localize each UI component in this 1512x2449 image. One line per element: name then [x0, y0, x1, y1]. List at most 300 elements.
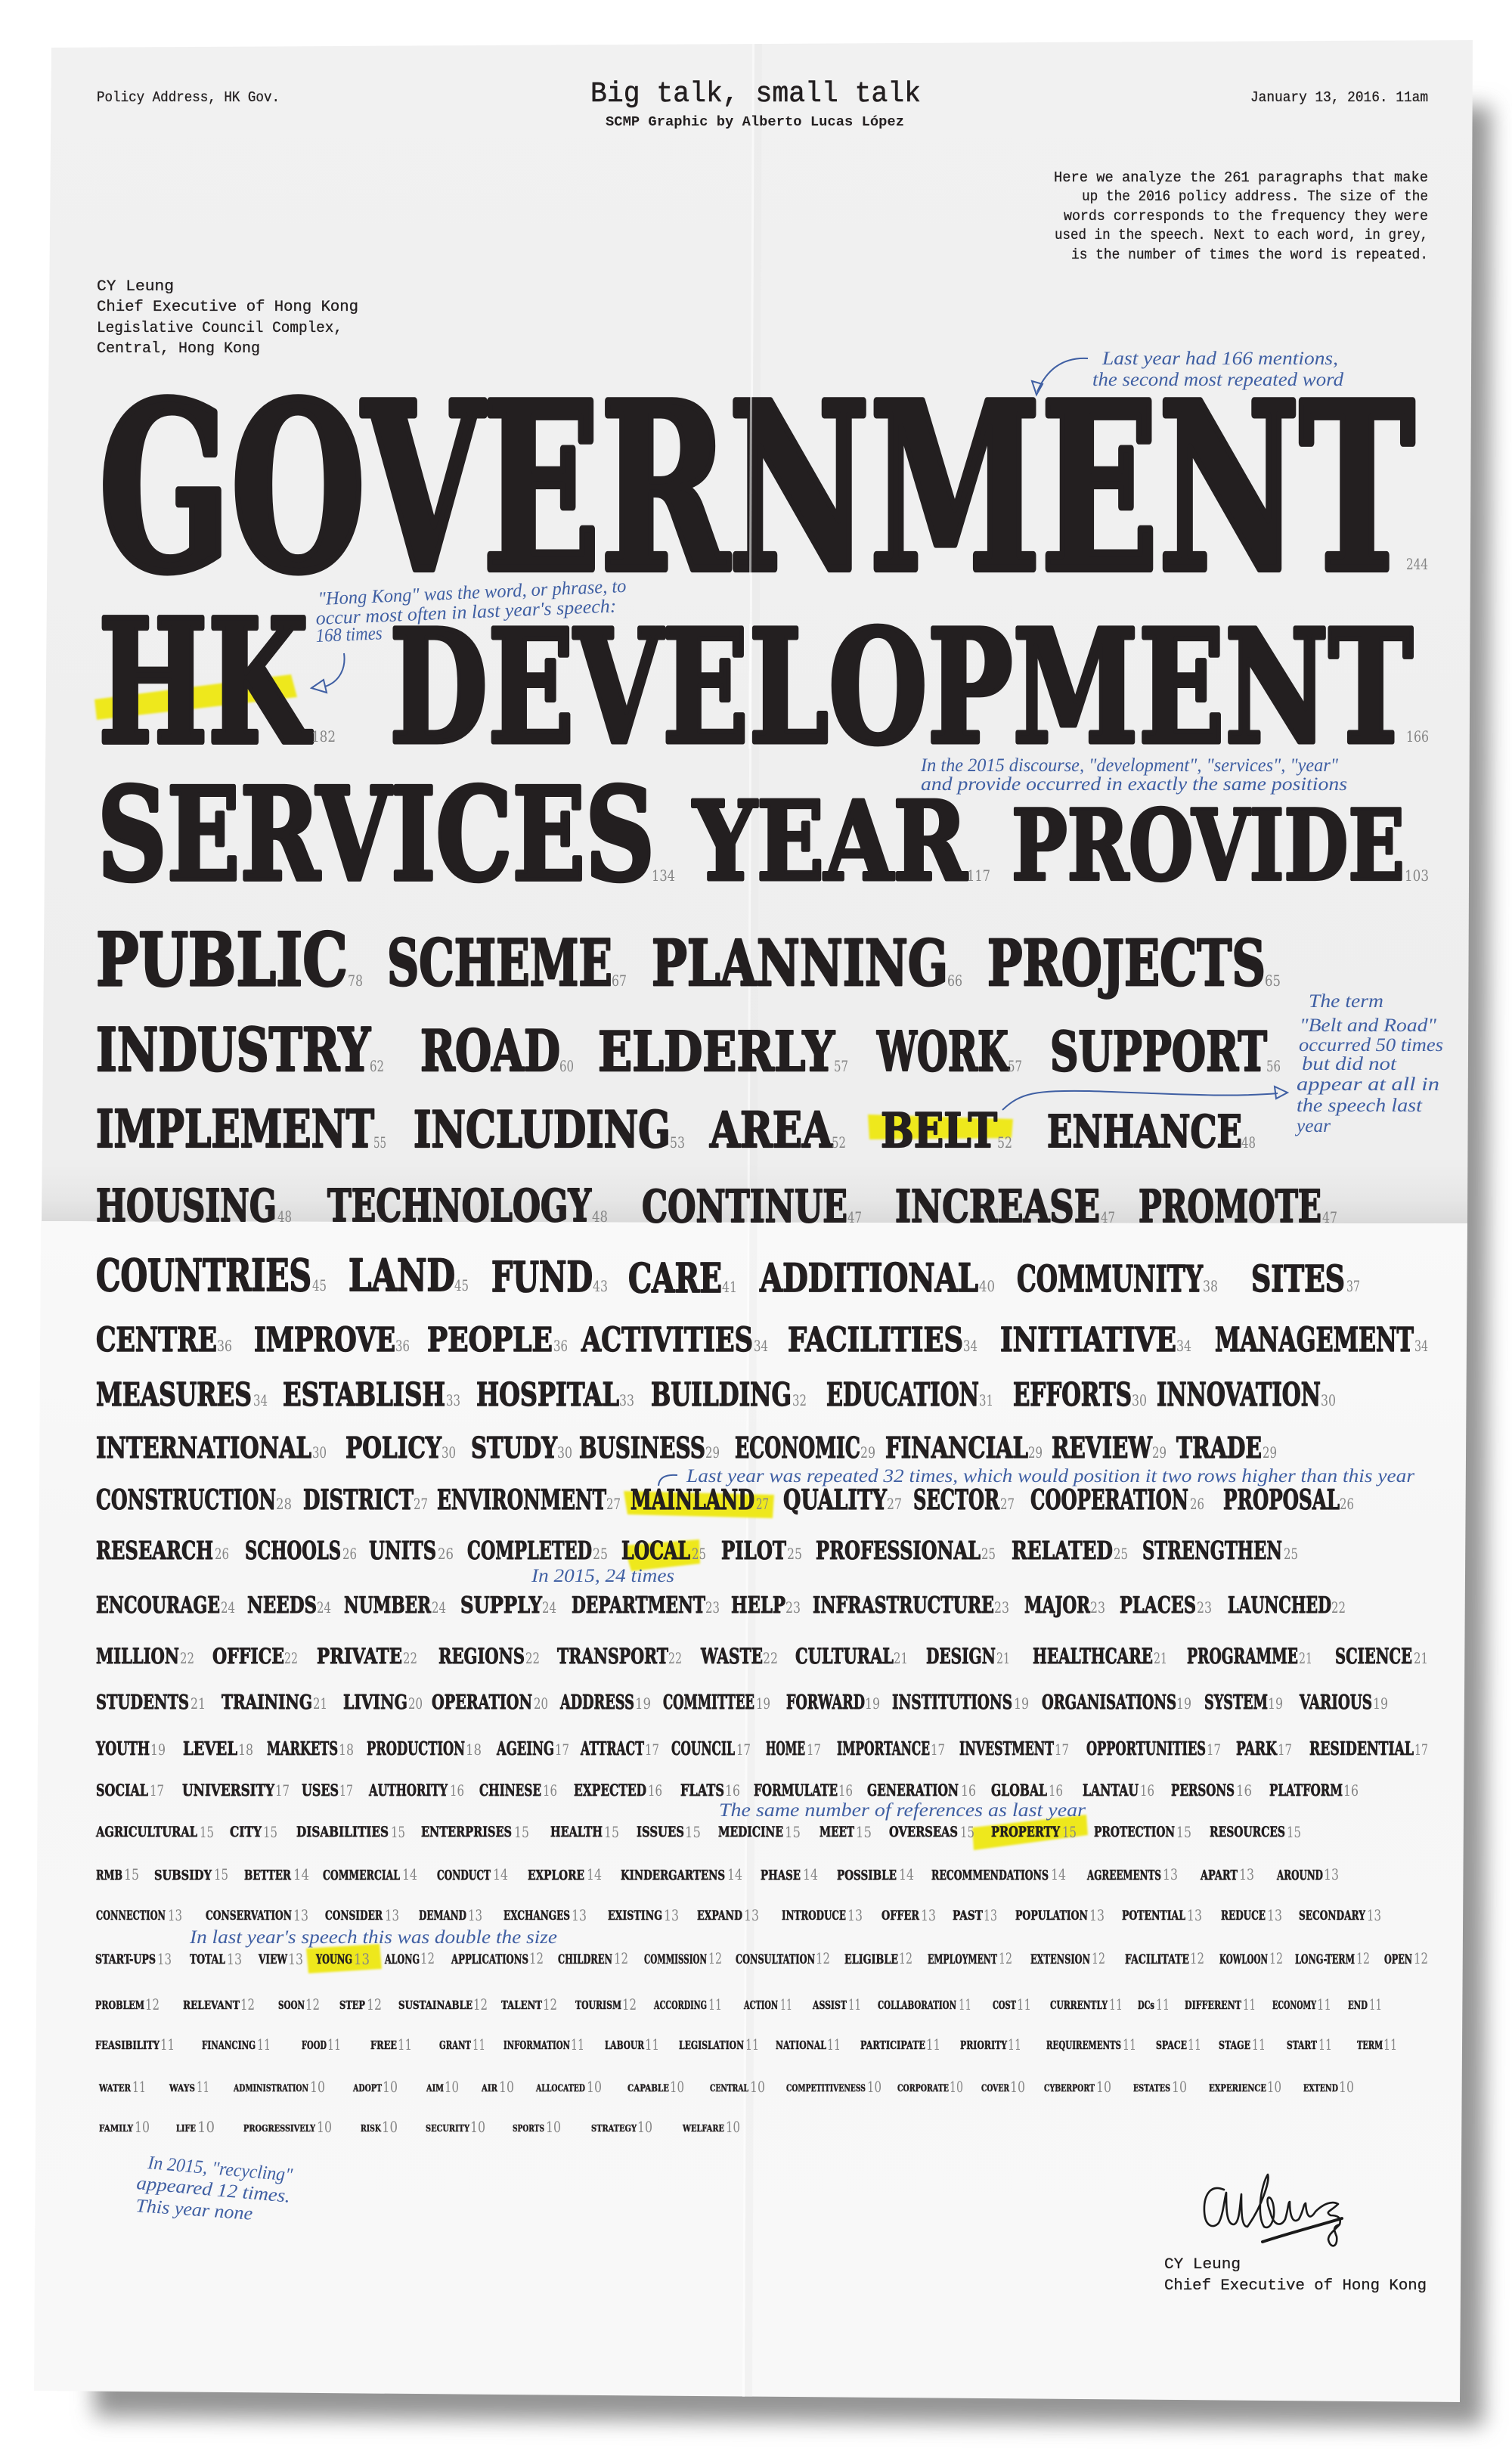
word row 24: 11	[571, 2035, 584, 2054]
word row 14: 23	[1197, 1598, 1212, 1617]
word row 23: 11	[1369, 1995, 1382, 2013]
word row 2: HK DEVELOPMENT: HK	[98, 583, 312, 783]
word row 19: 15	[856, 1823, 872, 1841]
word row 22: 12	[999, 1949, 1012, 1967]
word row 6: 52	[997, 1133, 1012, 1152]
word row 22: 12	[1092, 1949, 1105, 1967]
word row 11: TRADE	[1176, 1431, 1262, 1465]
word row 26: PROGRESSIVELY	[243, 2122, 316, 2134]
word row 19: 15	[960, 1823, 974, 1841]
word row 4	[96, 917, 1281, 1003]
word row 16: 19	[1373, 1694, 1388, 1713]
word row 18: CHINESE	[479, 1781, 541, 1800]
word row 6: 52	[832, 1133, 846, 1152]
word row 21: 13	[744, 1906, 759, 1924]
word row 5: ELDERLY	[598, 1019, 835, 1083]
word row 8: 43	[593, 1277, 608, 1295]
word row 6: 53	[670, 1133, 685, 1152]
note: same references: The same number of references as last year	[719, 1800, 1086, 1821]
word row 23: ACCORDING	[653, 1998, 707, 2012]
word row 1: GOVERNMENT: 244	[1406, 555, 1428, 573]
word row 22: LONG-TERM	[1295, 1952, 1355, 1967]
word row 21: DEMAND	[419, 1908, 466, 1924]
word row 23: 11	[959, 1995, 971, 2013]
word row 10: 33	[446, 1391, 460, 1409]
word row 17	[95, 1738, 1428, 1759]
word row 11: INTERNATIONAL	[96, 1431, 311, 1465]
word row 15	[96, 1644, 1428, 1669]
word row 21: POPULATION	[1015, 1908, 1088, 1924]
word row 22: 13	[354, 1950, 370, 1968]
note: last year had 166 mentions: the second most repeated word	[1092, 370, 1344, 390]
word row 26: STRATEGY	[591, 2122, 637, 2134]
header: left source: Policy Address, HK Gov.	[97, 89, 280, 106]
word row 24: 11	[160, 2035, 175, 2054]
word row 20: 15	[214, 1865, 228, 1883]
word row 22: OPEN	[1384, 1952, 1412, 1967]
word row 24: 11	[745, 2035, 759, 2054]
word row 21: 13	[1187, 1906, 1202, 1924]
word row 22: EMPLOYMENT	[928, 1952, 997, 1967]
word row 20: 14	[293, 1865, 309, 1883]
intro text block: up the 2016 policy address. The size of the	[1082, 188, 1428, 205]
word row 6: IMPLEMENT	[96, 1099, 374, 1160]
word row 26: 10	[382, 2118, 398, 2136]
word row 9: PEOPLE	[427, 1321, 553, 1359]
word row 20	[96, 1865, 1339, 1883]
word row 19: ENTERPRISES	[421, 1824, 512, 1840]
word row 17: PRODUCTION	[367, 1738, 465, 1759]
word row 22: ELIGIBLE	[844, 1952, 898, 1967]
word row 17: INVESTMENT	[959, 1738, 1054, 1759]
word row 25: 10	[1010, 2078, 1025, 2096]
note: 2015 discourse	[920, 755, 1347, 795]
word row 20: SUBSIDY	[154, 1868, 212, 1883]
word row 22: TOTAL	[190, 1952, 225, 1967]
word row 20: EXPLORE	[528, 1868, 584, 1883]
word row 16: ORGANISATIONS	[1042, 1691, 1176, 1714]
word row 22: APPLICATIONS	[451, 1952, 528, 1967]
word row 19: 15	[1062, 1823, 1077, 1841]
word row 18: 17	[275, 1781, 290, 1800]
word row 14: 24	[221, 1598, 235, 1617]
word row 19: DISABILITIES	[296, 1824, 389, 1840]
word row 25: 10	[587, 2078, 602, 2096]
word row 25: AIR	[481, 2083, 497, 2094]
word row 23: 11	[708, 1995, 722, 2013]
word row 26	[99, 2118, 740, 2136]
word row 19: 15	[263, 1823, 277, 1841]
word row 7: 47	[847, 1208, 862, 1226]
word row 6	[96, 1099, 1256, 1160]
word row 19	[95, 1823, 1301, 1841]
word row 2: HK DEVELOPMENT	[98, 583, 1429, 783]
word row 9: ACTIVITIES	[581, 1321, 753, 1359]
arrow: to HK	[311, 653, 345, 693]
word row 8: ADDITIONAL	[759, 1256, 978, 1301]
word row 16: 21	[191, 1694, 206, 1713]
word row 24: GRANT	[439, 2039, 471, 2052]
word row 8: 41	[722, 1278, 737, 1296]
word row 26: WELFARE	[682, 2122, 724, 2134]
word row 15: 22	[668, 1649, 682, 1667]
word row 25: ALLOCATED	[535, 2083, 585, 2094]
word row 23: 12	[367, 1995, 382, 2013]
word row 11: 29	[860, 1443, 875, 1462]
address block: CY Leung	[97, 278, 174, 296]
word row 13: RELATED	[1012, 1536, 1113, 1565]
word row 5: SUPPORT	[1050, 1019, 1267, 1083]
word row 25: 11	[132, 2078, 146, 2096]
word row 22: KOWLOON	[1219, 1952, 1268, 1967]
note: Belt and Road: appear at all in	[1297, 1074, 1439, 1095]
word row 19: CITY	[230, 1824, 262, 1840]
note: Belt and Road: occurred 50 times	[1299, 1035, 1443, 1056]
word row 3: YEAR	[692, 777, 968, 905]
word row 7: INCREASE	[895, 1180, 1100, 1232]
word row 24: 11	[398, 2035, 412, 2054]
word row 24: FINANCING	[202, 2039, 256, 2052]
note: 2015 discourse: and provide occurred in exactly the same positions	[921, 774, 1347, 795]
word row 19: 15	[1176, 1823, 1191, 1841]
word row 23: 12	[305, 1995, 320, 2013]
word row 17: LEVEL	[183, 1738, 237, 1759]
word row 5: 57	[1008, 1057, 1022, 1075]
note: recycling: This year none	[135, 2196, 253, 2224]
word row 18: GENERATION	[867, 1781, 959, 1800]
word row 16: 19	[1176, 1694, 1191, 1713]
word row 12: 27	[414, 1495, 428, 1513]
word row 23: 11	[848, 1995, 861, 2013]
word row 23: COLLABORATION	[878, 1998, 956, 2012]
word row 10: 33	[619, 1391, 634, 1409]
word row 23: 12	[543, 1995, 557, 2013]
word row 10: 34	[253, 1391, 268, 1409]
word row 17: 17	[736, 1741, 751, 1759]
word row 19: 15	[514, 1823, 529, 1841]
word row 16: TRAINING	[222, 1691, 312, 1714]
word row 12: ENVIRONMENT	[437, 1484, 606, 1516]
word row 13: 25	[1284, 1545, 1298, 1563]
word row 20: COMMERCIAL	[323, 1868, 400, 1883]
word row 22: COMMISSION	[644, 1952, 707, 1967]
word row 23: CURRENTLY	[1050, 1998, 1108, 2012]
title: Big talk, small talk	[590, 78, 921, 110]
word row 14	[96, 1592, 1346, 1619]
word row 7: 47	[1322, 1208, 1337, 1226]
word row 14: 23	[705, 1598, 720, 1617]
word row 20: 14	[587, 1865, 602, 1883]
word row 8: FUND	[491, 1252, 593, 1301]
word row 5: INDUSTRY	[96, 1015, 371, 1085]
word row 24: 11	[827, 2035, 841, 2054]
word row 20: 14	[727, 1865, 742, 1883]
word row 18: GLOBAL	[991, 1781, 1047, 1800]
word row 15: 22	[525, 1649, 540, 1667]
word row 21: PAST	[953, 1908, 983, 1924]
word row 12: 26	[1190, 1495, 1204, 1513]
word row 19: OVERSEAS	[889, 1824, 958, 1840]
word row 24: STAGE	[1219, 2039, 1250, 2052]
word row 19: 15	[785, 1823, 801, 1841]
word row 14: 23	[785, 1598, 801, 1617]
word row 26: SECURITY	[426, 2122, 470, 2134]
word row 10: INNOVATION	[1157, 1376, 1321, 1413]
word row 25: CENTRAL	[710, 2083, 748, 2094]
word row 23: DCs	[1138, 1998, 1154, 2012]
word row 25: EXPERIENCE	[1209, 2083, 1266, 2094]
word row 23: 12	[145, 1995, 160, 2013]
word row 25: 10	[1339, 2078, 1354, 2096]
word row 16: LIVING	[343, 1691, 407, 1714]
word row 24: 11	[1318, 2035, 1332, 2054]
word row 12: COOPERATION	[1030, 1484, 1188, 1516]
word row 20: 14	[803, 1865, 818, 1883]
word row 12: SECTOR	[913, 1484, 1000, 1516]
word row 18: 16	[1343, 1781, 1359, 1800]
word row 18: 16	[838, 1781, 853, 1800]
word row 25: 10	[1096, 2078, 1111, 2096]
word row 14: MAJOR	[1024, 1592, 1091, 1619]
word row 12: QUALITY	[783, 1484, 888, 1516]
word row 21: 13	[847, 1906, 863, 1924]
note: Hong Kong: 168 times	[315, 623, 383, 646]
word row 16: ADDRESS	[559, 1691, 634, 1714]
word row 13: PILOT	[721, 1536, 786, 1565]
word row 18: EXPECTED	[574, 1781, 646, 1800]
word row 11: POLICY	[345, 1431, 442, 1465]
word row 16: VARIOUS	[1299, 1691, 1372, 1714]
word row 23: 11	[1243, 1995, 1256, 2013]
word row 9: 36	[553, 1337, 568, 1355]
word row 26: FAMILY	[99, 2122, 134, 2134]
word row 13: 25	[981, 1545, 996, 1563]
word row 14: NUMBER	[344, 1592, 432, 1619]
word row 17: 17	[1207, 1741, 1221, 1759]
note: double the size: In last year's speech this was double the size	[189, 1927, 557, 1948]
word row 17: IMPORTANCE	[837, 1738, 930, 1759]
word row 23: SOON	[278, 1998, 305, 2012]
word row 21: 13	[1089, 1906, 1105, 1924]
word row 22: 12	[899, 1949, 912, 1967]
word row 25: CORPORATE	[897, 2083, 949, 2094]
word row 18: LANTAU	[1083, 1781, 1139, 1800]
word row 9: 36	[395, 1337, 410, 1355]
word row 4: 67	[612, 972, 627, 990]
word row 22: 12	[1190, 1949, 1204, 1967]
word row 23: END	[1348, 1998, 1368, 2012]
word row 4: 78	[348, 972, 363, 990]
word row 15: PRIVATE	[317, 1644, 402, 1669]
word row 17: 17	[1278, 1741, 1292, 1759]
sign-off text: Chief Executive of Hong Kong	[1164, 2277, 1427, 2295]
intro text block: words corresponds to the frequency they were	[1064, 208, 1428, 225]
word row 20: RECOMMENDATIONS	[931, 1868, 1049, 1883]
word row 10: HOSPITAL	[476, 1376, 619, 1413]
word row 12: 28	[276, 1495, 292, 1513]
word row 26: 10	[637, 2118, 652, 2136]
word row 23: 11	[1017, 1995, 1031, 2013]
word row 22: 12	[708, 1949, 722, 1967]
word row 12	[96, 1484, 1354, 1516]
word row 23: 11	[1109, 1995, 1123, 2013]
word row 6: ENHANCE	[1047, 1105, 1242, 1158]
word row 3	[98, 759, 1429, 910]
word row 21: 13	[572, 1906, 587, 1924]
word row 23: ECONOMY	[1272, 1998, 1316, 2012]
word row 6: INCLUDING	[414, 1100, 671, 1159]
word row 24: SPACE	[1156, 2039, 1187, 2052]
word row 23	[95, 1995, 1382, 2013]
word row 22: VIEW	[258, 1952, 287, 1967]
word row 11: ECONOMIC	[735, 1431, 860, 1465]
signature	[1204, 2175, 1342, 2246]
word row 9: 34	[1414, 1337, 1428, 1355]
word row 14: INFRASTRUCTURE	[813, 1592, 994, 1619]
word row 14: ENCOURAGE	[96, 1592, 220, 1619]
word row 8: COUNTRIES	[96, 1250, 311, 1301]
word row 21: 13	[1267, 1906, 1282, 1924]
word row 21: 13	[921, 1906, 936, 1924]
word row 22: FACILITATE	[1125, 1952, 1189, 1967]
word row 21: POTENTIAL	[1122, 1908, 1185, 1924]
word row 17: RESIDENTIAL	[1309, 1738, 1414, 1759]
highlight: MAINLAND	[624, 1491, 774, 1518]
word row 18: FLATS	[680, 1781, 724, 1800]
highlight: HK	[94, 674, 297, 720]
word row 22: CONSULTATION	[736, 1952, 815, 1967]
word row 16: 19	[756, 1694, 770, 1713]
word row 22: 12	[1269, 1949, 1283, 1967]
word row 23: PROBLEM	[95, 1998, 144, 2012]
word row 20: PHASE	[761, 1868, 801, 1883]
word row 15: MILLION	[96, 1644, 179, 1669]
word row 21: OFFER	[881, 1908, 920, 1924]
word row 23: ACTION	[743, 1998, 778, 2012]
word row 12: PROPOSAL	[1223, 1484, 1340, 1516]
word row 16: 21	[313, 1694, 327, 1713]
word row 17: PARK	[1236, 1738, 1278, 1759]
word row 15: 22	[763, 1649, 778, 1667]
word row 17: 19	[150, 1741, 166, 1759]
word row 26: SPORTS	[513, 2122, 544, 2134]
word row 12: 27	[606, 1495, 621, 1513]
word row 13: 26	[438, 1545, 454, 1563]
word row 7: 48	[277, 1207, 292, 1226]
word row 17: MARKETS	[267, 1738, 338, 1759]
word row 22: CHILDREN	[558, 1952, 612, 1967]
word row 7: 48	[592, 1207, 608, 1226]
intro text block: Here we analyze the 261 paragraphs that make	[1054, 169, 1428, 186]
word row 10: EDUCATION	[826, 1376, 979, 1413]
word row 8: COMMUNITY	[1017, 1258, 1203, 1300]
word row 23: 12	[622, 1995, 637, 2013]
word row 13: 25	[1114, 1545, 1128, 1563]
word row 19: PROTECTION	[1094, 1824, 1175, 1840]
word row 14: 22	[1331, 1598, 1346, 1617]
word row 23: DIFFERENT	[1185, 1998, 1242, 2012]
word row 26: 10	[546, 2118, 561, 2136]
word row 25: CYBERPORT	[1044, 2083, 1095, 2094]
word row 5: 57	[834, 1057, 848, 1075]
word row 15: OFFICE	[212, 1644, 284, 1669]
sign-off text	[1164, 2256, 1427, 2295]
word row 25: 10	[1172, 2078, 1187, 2096]
word row 21: SECONDARY	[1299, 1908, 1366, 1924]
word row 5: 56	[1266, 1057, 1281, 1075]
word row 11: STUDY	[471, 1431, 558, 1465]
word row 18: 17	[339, 1781, 353, 1800]
word row 18: PLATFORM	[1269, 1781, 1343, 1800]
word row 12: DISTRICT	[303, 1484, 414, 1516]
word row 5: 62	[370, 1057, 384, 1075]
note: In 2015, 24 times: In 2015, 24 times	[531, 1566, 674, 1586]
word row 25: AIM	[426, 2083, 444, 2094]
word row 24: LEGISLATION	[679, 2039, 744, 2052]
word row 20: 13	[1163, 1865, 1178, 1883]
intro text block	[1054, 169, 1428, 263]
word row 13: 25	[692, 1545, 706, 1563]
word row 20: 14	[402, 1865, 417, 1883]
word row 17: 17	[931, 1741, 945, 1759]
word row 10: 30	[1321, 1391, 1336, 1409]
word row 4: PLANNING	[652, 926, 948, 1000]
note: Hong Kong: "Hong Kong" was the word, or phrase, to	[318, 576, 627, 609]
word row 15: REGIONS	[438, 1644, 525, 1669]
word row 17: 17	[555, 1741, 569, 1759]
highlight: LOCAL	[624, 1539, 700, 1571]
word row 23: STEP	[339, 1998, 365, 2012]
word row 18: 16	[648, 1781, 662, 1800]
word row 6: 55	[373, 1133, 386, 1152]
word row 3: 134	[652, 866, 675, 885]
word row 14: 24	[542, 1598, 556, 1617]
word row 19: AGRICULTURAL	[95, 1824, 197, 1840]
word row 12: 27	[756, 1495, 769, 1513]
word row 18: USES	[302, 1781, 339, 1800]
word row 13: COMPLETED	[467, 1536, 592, 1565]
word row 15: 21	[894, 1649, 908, 1667]
word row 20: 14	[899, 1865, 914, 1883]
word row 20: 15	[124, 1865, 139, 1883]
word row 26: RISK	[361, 2122, 382, 2134]
word row 25: 10	[383, 2078, 398, 2096]
word row 20: AGREEMENTS	[1086, 1868, 1161, 1883]
word row 25: EXTEND	[1303, 2083, 1338, 2094]
word row 17: OPPORTUNITIES	[1086, 1738, 1206, 1759]
word row 24: INFORMATION	[503, 2039, 570, 2052]
word row 18: 16	[725, 1781, 740, 1800]
word row 17: COUNCIL	[671, 1738, 735, 1759]
note: Belt and Road: The term	[1309, 991, 1383, 1012]
address block	[97, 278, 358, 358]
word row 25: 10	[950, 2078, 963, 2096]
note: last year MAINLAND: Last year was repeated 32 times, which would position it two rows higher than this year	[686, 1466, 1414, 1486]
word row 25: 10	[1267, 2078, 1281, 2096]
word row 20: 13	[1239, 1865, 1254, 1883]
word row 14: 24	[432, 1598, 446, 1617]
word row 23: ASSIST	[812, 1998, 847, 2012]
word row 20: KINDERGARTENS	[621, 1868, 725, 1883]
word row 8: 38	[1203, 1277, 1218, 1295]
word row 15: PROGRAMME	[1187, 1644, 1298, 1669]
word row 21: CONNECTION	[96, 1908, 166, 1924]
word row 14: NEEDS	[247, 1592, 317, 1619]
word row 6: 48	[1241, 1133, 1256, 1152]
word row 24: 11	[1123, 2035, 1136, 2054]
word row 13: LOCAL	[621, 1536, 690, 1565]
word row 20: CONDUCT	[437, 1868, 491, 1883]
